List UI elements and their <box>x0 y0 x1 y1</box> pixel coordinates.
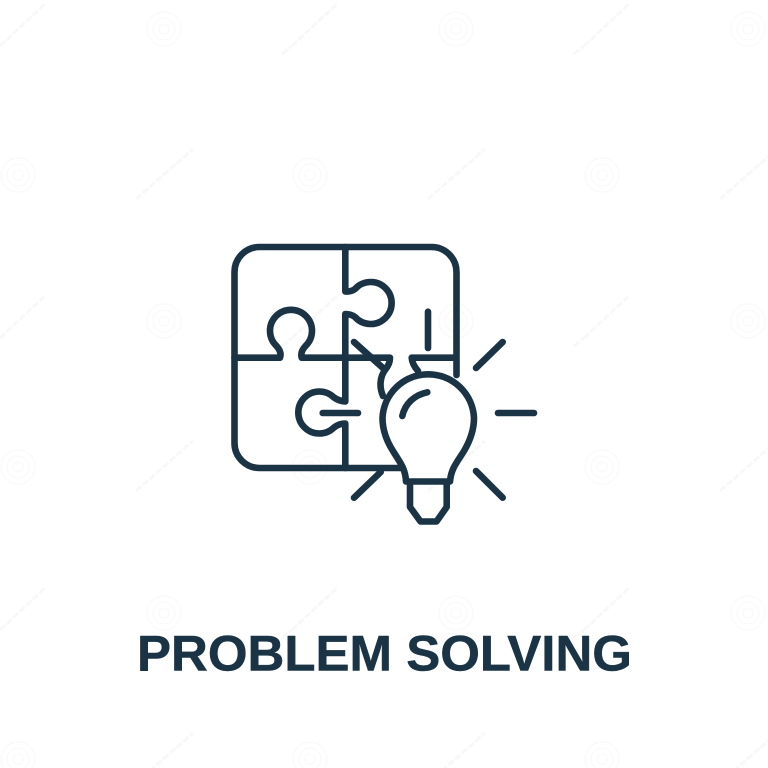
puzzle frame <box>234 247 456 468</box>
icon: puzzle with light bulb <box>234 247 534 522</box>
rays <box>323 312 534 498</box>
puzzle seam: vertical with right and left knobs <box>298 247 392 468</box>
title: PROBLEM SOLVING <box>137 626 632 682</box>
light bulb outline <box>382 374 474 482</box>
bulb highlight <box>402 392 427 416</box>
bulb base <box>410 483 447 522</box>
puzzle seam: horizontal with upper knob <box>234 310 390 396</box>
puzzle seam: right segment <box>412 358 453 371</box>
